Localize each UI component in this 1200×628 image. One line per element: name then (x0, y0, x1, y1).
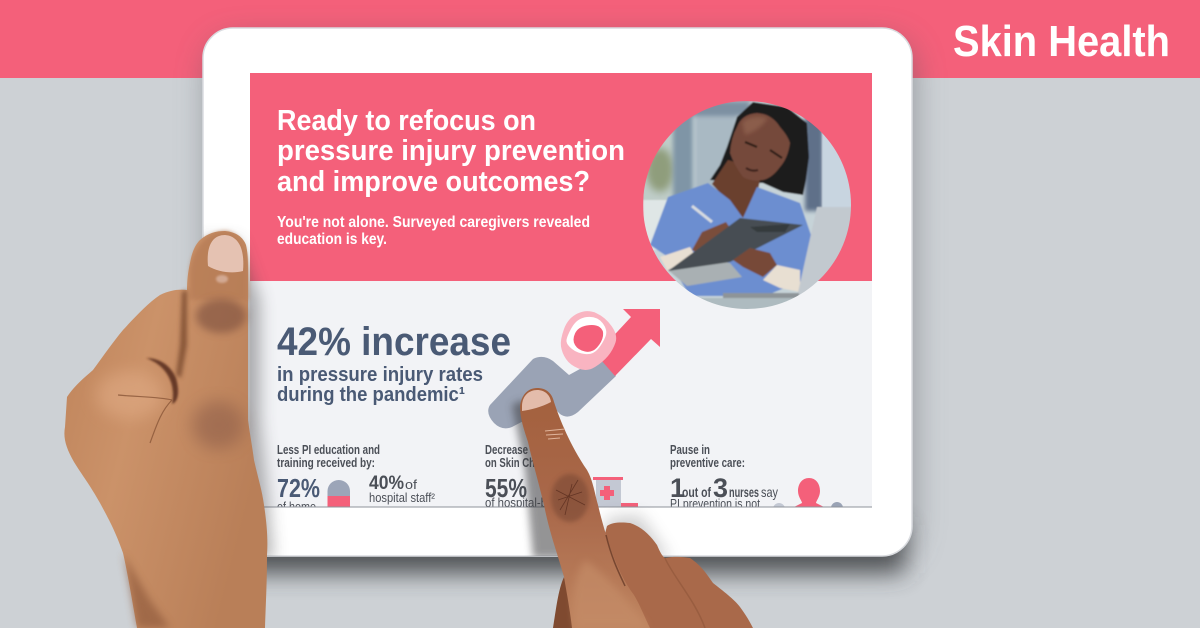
neck (712, 160, 762, 218)
finger gap crease (606, 535, 625, 586)
icon: hospital (593, 477, 638, 506)
column: pause in preventive care: say (761, 484, 778, 500)
column: decrease on skin champions: 55% (485, 473, 527, 503)
paper under clipboard (668, 262, 742, 287)
holding hand (733, 248, 777, 277)
upper joint creases (545, 429, 565, 439)
heading: Ready to refocus on (277, 105, 536, 137)
column: decrease on skin champions: Decrease (485, 443, 528, 457)
left hand holding tablet (64, 231, 267, 628)
stat: 42% increase: 42% increase (277, 320, 511, 364)
hair back (710, 102, 809, 195)
face (730, 113, 790, 181)
knuckles (580, 522, 753, 628)
fist shadow along thumb (176, 290, 187, 378)
icon: rising arrow with wound (488, 309, 660, 428)
finger lit base (573, 560, 648, 628)
column: less PI education: 72% (277, 473, 320, 503)
tablet shadow (208, 40, 913, 560)
knuckle creases (556, 480, 585, 515)
sleeve (660, 247, 695, 272)
column: less PI education: hospital staff² (369, 490, 436, 505)
heading (277, 105, 625, 198)
column: pause in preventive care (670, 443, 778, 511)
thumb lunula (216, 275, 228, 283)
tablet screen (250, 73, 872, 520)
column: pause in preventive care: 3 (713, 473, 728, 503)
column: less PI education: 40% (369, 473, 404, 494)
brand title: Skin Health: Skin Health (953, 17, 1170, 66)
fist fold (146, 358, 178, 404)
writing hand (692, 222, 730, 254)
icon: half-filled pill (328, 480, 350, 506)
column: less PI education (277, 444, 435, 506)
heading: pressure injury prevention (277, 135, 625, 167)
column: decrease on skin champions: of hospital-b (485, 496, 547, 510)
screen edge (250, 506, 872, 508)
finger knuckle (551, 474, 589, 522)
tablet bottom shadow (225, 525, 905, 573)
palm creases (118, 395, 172, 443)
thumb tip shading (190, 231, 248, 300)
column: pause in preventive care: preventive care: (670, 456, 745, 470)
column: pause in preventive care: out of (682, 484, 711, 500)
column: less PI education: training received by: (277, 456, 375, 470)
column: decrease on skin champions: on Skin Ch (485, 456, 535, 470)
fingernail (522, 390, 551, 411)
laptop (797, 207, 852, 298)
thumb knuckle (196, 299, 246, 333)
column: pause in preventive care: Pause in (670, 443, 710, 457)
stat caption (277, 364, 483, 406)
photo: nurse with clipboard (643, 101, 852, 310)
column: pause in preventive care: 1 (670, 473, 685, 503)
index finger (520, 388, 650, 628)
wrist shadow (123, 553, 170, 628)
icon: nurses (774, 478, 843, 506)
stat caption: during the pandemic¹ (277, 384, 465, 406)
top pink band (0, 0, 1200, 78)
hand shadows on tablet (200, 240, 670, 560)
palm highlight (96, 371, 164, 419)
subheading: education is key. (277, 231, 387, 248)
stat caption: in pressure injury rates (277, 364, 483, 386)
tablet (200, 28, 912, 560)
subheading (277, 214, 590, 248)
column: less PI education: of home (277, 500, 316, 514)
scrubs (650, 183, 811, 296)
heading: and improve outcomes? (277, 166, 590, 198)
right hand pointing at tablet (520, 388, 753, 628)
back fingers (553, 577, 580, 628)
clipboard (668, 218, 803, 271)
thumbnail (208, 235, 243, 272)
column: less PI education: Less PI education and (277, 443, 380, 457)
subheading: You're not alone. Surveyed caregivers revealed (277, 214, 590, 231)
thumb lower shading (192, 401, 244, 449)
column: pause in preventive care: nurses (729, 484, 759, 500)
column: pause in preventive care: PI prevention is not (670, 496, 760, 511)
panel: pink header (250, 73, 872, 281)
column: decrease on skin champions (485, 445, 544, 506)
column: less PI education: of (405, 477, 417, 492)
